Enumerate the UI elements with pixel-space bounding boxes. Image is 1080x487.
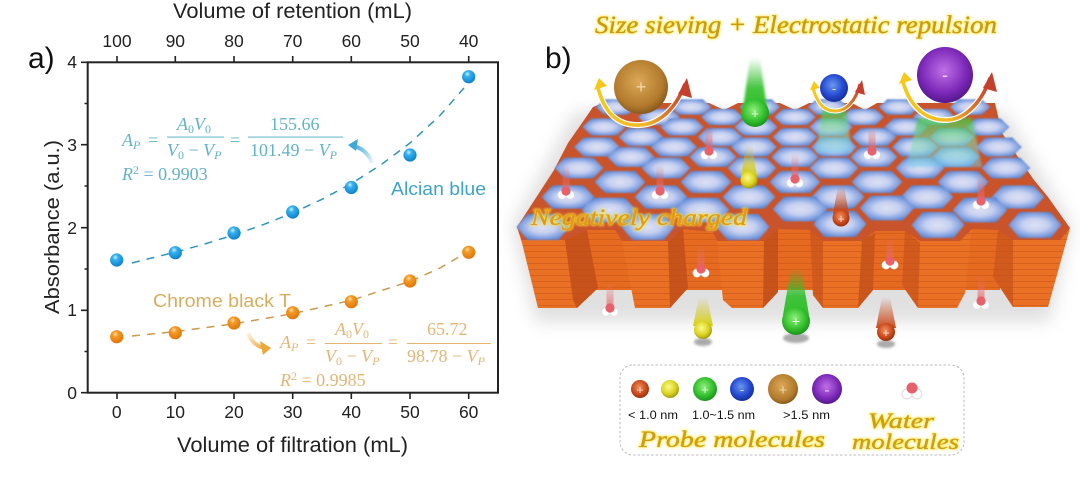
bottom axis tick labels: 40 [342, 402, 361, 422]
orange equation: = 0.9985 [297, 370, 366, 390]
orange equation: 0 [336, 354, 342, 368]
legend probe molecules [631, 374, 842, 404]
orange equation: V [361, 346, 374, 366]
bottom axis tick labels: 30 [283, 402, 303, 422]
membrane back wall [585, 228, 1000, 290]
blue equation: = [230, 130, 240, 150]
Alcian blue label: Alcian blue [391, 179, 486, 199]
orange fitted dashed curve [132, 254, 464, 336]
blue equation: V [203, 140, 216, 160]
left axis tick labels: 0 [67, 383, 77, 403]
permeated green molecule [782, 268, 810, 343]
legend size labels [628, 410, 830, 422]
water label: Water [868, 408, 935, 433]
permeated red molecule: + [882, 326, 890, 340]
orange equation: V [352, 319, 365, 339]
legend size labels: < 1.0 nm [628, 410, 678, 422]
top axis title: Volume of retention (mL) [173, 0, 412, 23]
left axis tick labels: 3 [67, 135, 77, 155]
left axis title: Absorbance (a.u.) [42, 140, 64, 314]
legend water molecule [902, 382, 922, 399]
panel label b): b) [545, 42, 572, 75]
green tail and positive molecule: + [751, 106, 759, 121]
blue equation: P [132, 138, 141, 152]
note: negatively charged: Negatively charged [530, 205, 748, 230]
heading: size sieving and electrostatic repulsion: Size sieving + Electrostatic repulsion [595, 12, 997, 39]
orange equation: V [325, 346, 338, 366]
panel label a): a) [28, 42, 55, 75]
permeated yellow molecule [693, 297, 713, 346]
orange equation: P [371, 354, 380, 368]
rejected molecule glow columns [816, 110, 982, 167]
purple negative molecule with rejection arrow: - [942, 65, 948, 85]
blue equation: 101.49 − V [250, 140, 330, 160]
blue equation: − [184, 140, 203, 160]
left axis tick labels: 2 [67, 218, 77, 238]
permeated red molecule [876, 297, 896, 348]
navy negative molecule with rejection arrow: - [832, 81, 836, 96]
brown positive molecule with rejection arrow: + [636, 77, 646, 97]
legend probe molecules: - [824, 382, 830, 399]
membrane hexagonal columns [515, 227, 1075, 310]
membrane top surface [517, 103, 1070, 241]
top axis tick labels: 70 [283, 31, 303, 51]
blue equation: A [121, 130, 134, 150]
orange equation: = [306, 332, 316, 352]
water molecules passing through [558, 125, 989, 316]
orange equation [279, 319, 491, 390]
blue equation: 0 [205, 122, 211, 136]
plot frame and ticks [81, 56, 498, 399]
orange equation: 65.72 [427, 319, 468, 339]
blue equation: P [213, 148, 222, 162]
permeated green molecule: + [792, 313, 800, 329]
bottom axis tick labels [112, 402, 479, 422]
orange equation: R [279, 370, 291, 390]
top axis tick labels: 90 [166, 31, 185, 51]
blue data points [110, 70, 475, 267]
red molecule in pore [832, 186, 850, 226]
legend probe molecules: - [740, 382, 744, 397]
left axis tick labels: 1 [67, 300, 77, 320]
top axis tick labels: 100 [102, 31, 132, 51]
blue equation: V [167, 140, 180, 160]
orange equation: 98.78 − V [407, 346, 478, 366]
top axis tick labels: 80 [224, 31, 244, 51]
orange equation: A [279, 332, 292, 352]
orange equation: A [334, 319, 347, 339]
left axis tick labels: 4 [67, 52, 77, 72]
top axis tick labels: 60 [342, 31, 361, 51]
top axis tick labels: 40 [459, 31, 479, 51]
blue equation: R [121, 164, 133, 184]
orange equation: 0 [346, 327, 352, 341]
blue fitted dashed curve [132, 88, 464, 263]
bottom axis tick labels: 10 [166, 402, 185, 422]
legend probe molecules: + [701, 382, 709, 397]
legend box [620, 365, 964, 455]
panel b: membrane schematic [512, 12, 1075, 455]
orange equation: P [477, 354, 486, 368]
blue equation: 155.66 [270, 114, 320, 134]
panel a: absorbance chart [28, 0, 498, 457]
orange equation: 0 [363, 327, 369, 341]
orange equation: P [290, 340, 299, 354]
blue equation: 0 [188, 122, 194, 136]
top axis tick labels: 50 [400, 31, 420, 51]
orange curved arrow [248, 333, 271, 355]
Chrome black T label: Chrome black T [153, 291, 291, 311]
orange equation: = [388, 332, 398, 352]
molecules label: molecules [852, 429, 959, 454]
left axis tick labels [67, 52, 77, 403]
blue curved arrow [348, 139, 372, 163]
orange equation: − [342, 346, 361, 366]
orange equation: 2 [291, 369, 297, 383]
soft shadow beneath membrane [512, 112, 1072, 322]
bottom axis tick labels: 0 [112, 402, 122, 422]
bottom axis tick labels: 60 [459, 402, 479, 422]
top axis tick labels [102, 31, 479, 51]
blue equation: 0 [178, 148, 184, 162]
orange data points [110, 246, 475, 343]
blue equation: = 0.9903 [139, 164, 208, 184]
blue equation: A [176, 114, 189, 134]
legend size labels: >1.5 nm [783, 410, 830, 422]
bottom axis tick labels: 50 [400, 402, 420, 422]
yellow molecule in pore [740, 145, 758, 188]
bottom axis tick labels: 20 [224, 402, 244, 422]
legend probe molecules: + [779, 382, 788, 399]
probe molecules label: Probe molecules [638, 427, 825, 452]
purple negative molecule with rejection arrow [899, 47, 997, 120]
blue equation: 2 [133, 163, 139, 177]
legend probe molecules: + [636, 383, 644, 397]
blue equation: = [148, 130, 158, 150]
blue equation: P [329, 148, 338, 162]
green tail and positive molecule [741, 58, 769, 127]
navy negative molecule with rejection arrow [810, 74, 865, 111]
blue equation [121, 114, 343, 184]
hexagonal pores [516, 99, 1062, 240]
blue equation: V [194, 114, 207, 134]
bottom axis title: Volume of filtration (mL) [177, 434, 408, 457]
legend size labels: 1.0~1.5 nm [692, 410, 755, 422]
red molecule in pore: + [837, 212, 845, 226]
brown positive molecule with rejection arrow [594, 60, 692, 125]
